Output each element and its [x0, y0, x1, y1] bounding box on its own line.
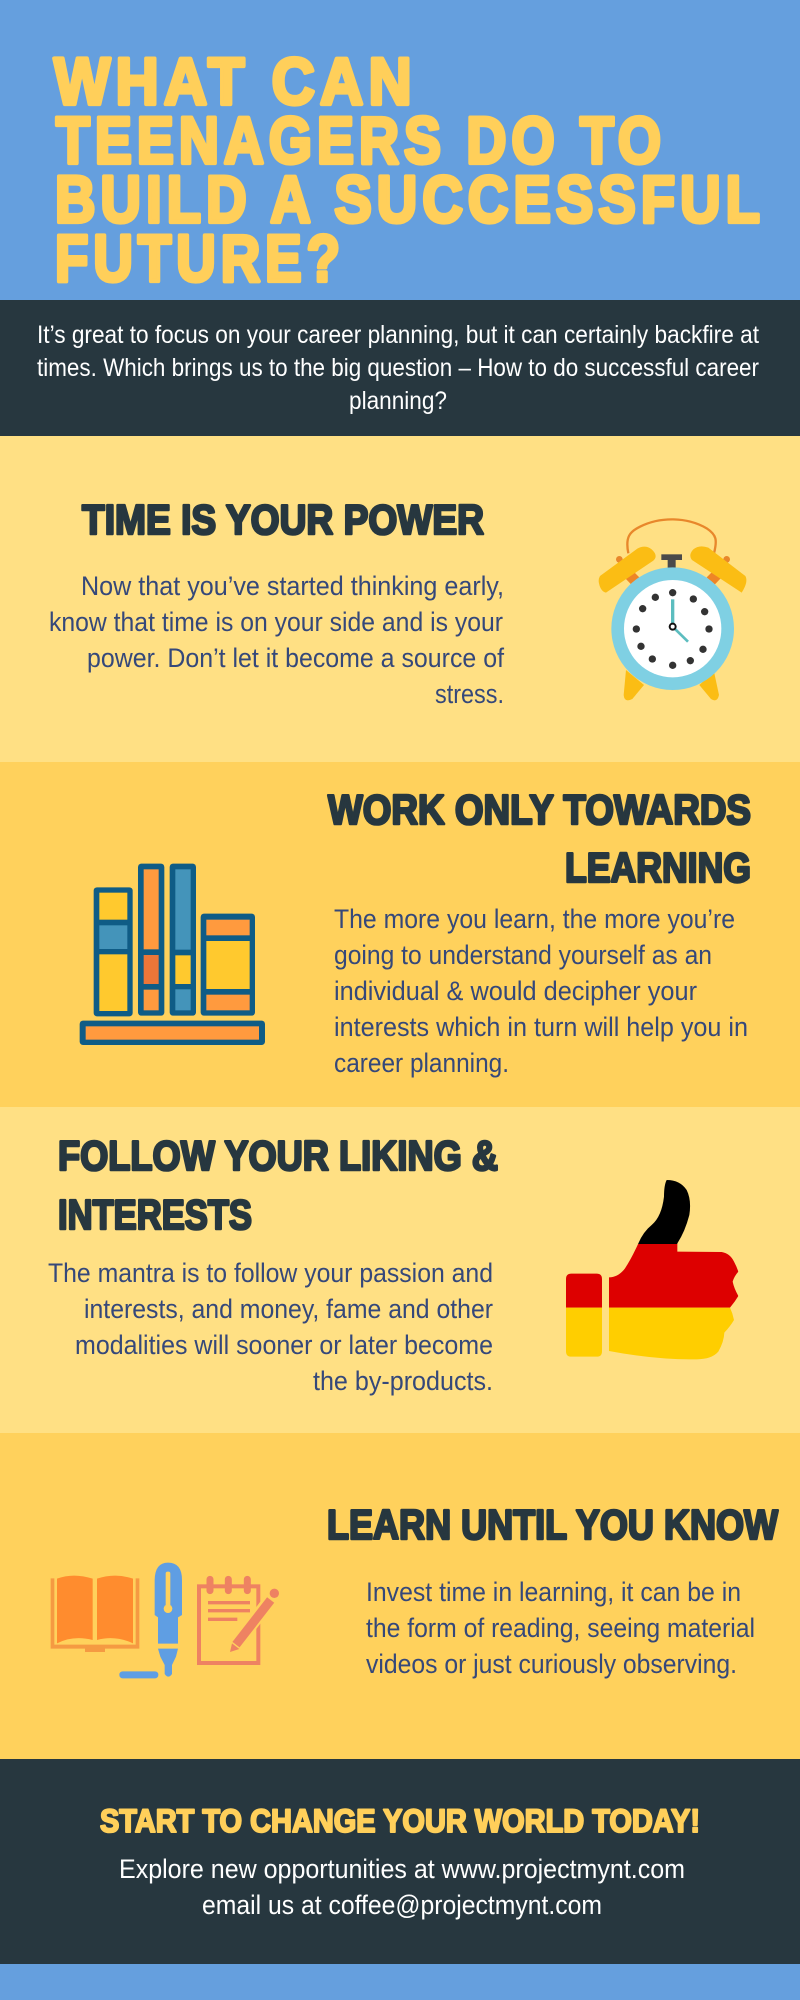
text block: learn: the form of reading, seeing material [366, 1613, 755, 1643]
text block: learning [334, 904, 748, 1078]
text block: time: stress. [435, 679, 504, 709]
title [54, 44, 765, 295]
text block: learning: individual & would decipher your [334, 976, 697, 1006]
text block: interests [48, 1258, 493, 1396]
text block: learning: going to understand yourself as an [334, 940, 712, 970]
heading: follow your liking and interests: INTERESTS [58, 1191, 252, 1238]
title: FUTURE? [55, 221, 345, 295]
heading: follow your liking and interests: FOLLOW YOUR LIKING & [58, 1132, 498, 1179]
panel: follow your liking and interests [0, 1107, 800, 1433]
title: TEENAGERS DO TO [56, 103, 666, 177]
text block: contact details [119, 1854, 685, 1920]
icon: thumbs up in German flag colours [566, 1180, 738, 1360]
icon: book, pen and notepad [51, 1563, 279, 1678]
panel: introduction [0, 300, 800, 436]
text block: time: Now that you’ve started thinking early, [81, 571, 504, 601]
panel: footer call to action [0, 1759, 800, 1964]
heading: time is your power: TIME IS YOUR POWER [82, 496, 484, 543]
text block: interests: The mantra is to follow your passion and [48, 1258, 493, 1288]
panel: work only towards learning [0, 762, 800, 1107]
text block: contact details: email us at coffee@projectmynt.com [202, 1890, 602, 1920]
text block: time [49, 571, 504, 709]
icon: books on shelf [80, 864, 265, 1045]
heading: follow your liking and interests [58, 1132, 498, 1238]
icon: alarm clock [599, 519, 746, 700]
text block: interests: the by-products. [313, 1366, 493, 1396]
panel: learn until you know [0, 1433, 800, 1759]
heading: work only towards learning: LEARNING [565, 844, 751, 891]
heading: work only towards learning [328, 786, 751, 891]
text block: intro: planning? [349, 387, 447, 415]
text block: interests: modalities will sooner or later become [75, 1330, 493, 1360]
panel: time is your power [0, 436, 800, 762]
text block: intro [37, 321, 759, 415]
text block: learning: career planning. [334, 1048, 509, 1078]
title: WHAT CAN [54, 44, 417, 118]
footer band [0, 1964, 800, 2000]
text block: learning: interests which in turn will help you in [334, 1012, 748, 1042]
text block: learn: Invest time in learning, it can be in [366, 1577, 741, 1607]
heading: work only towards learning: WORK ONLY TOWARDS [328, 786, 751, 833]
heading: call to action: START TO CHANGE YOUR WORLD TODAY! [100, 1803, 700, 1839]
text block: learn [366, 1577, 755, 1679]
text block: interests: interests, and money, fame and other [84, 1294, 493, 1324]
text block: time: power. Don’t let it become a source of [87, 643, 504, 673]
text block: contact details: Explore new opportunities at www.projectmynt.com [119, 1854, 685, 1884]
panel: title header [0, 0, 800, 300]
text block: learning: The more you learn, the more you’re [334, 904, 735, 934]
icon: open book [51, 1576, 139, 1652]
text block: learn: videos or just curiously observing. [366, 1649, 737, 1679]
text block: time: know that time is on your side and is your [49, 607, 503, 637]
icon: notepad and pencil [199, 1579, 279, 1663]
icon: fountain pen [119, 1563, 182, 1678]
